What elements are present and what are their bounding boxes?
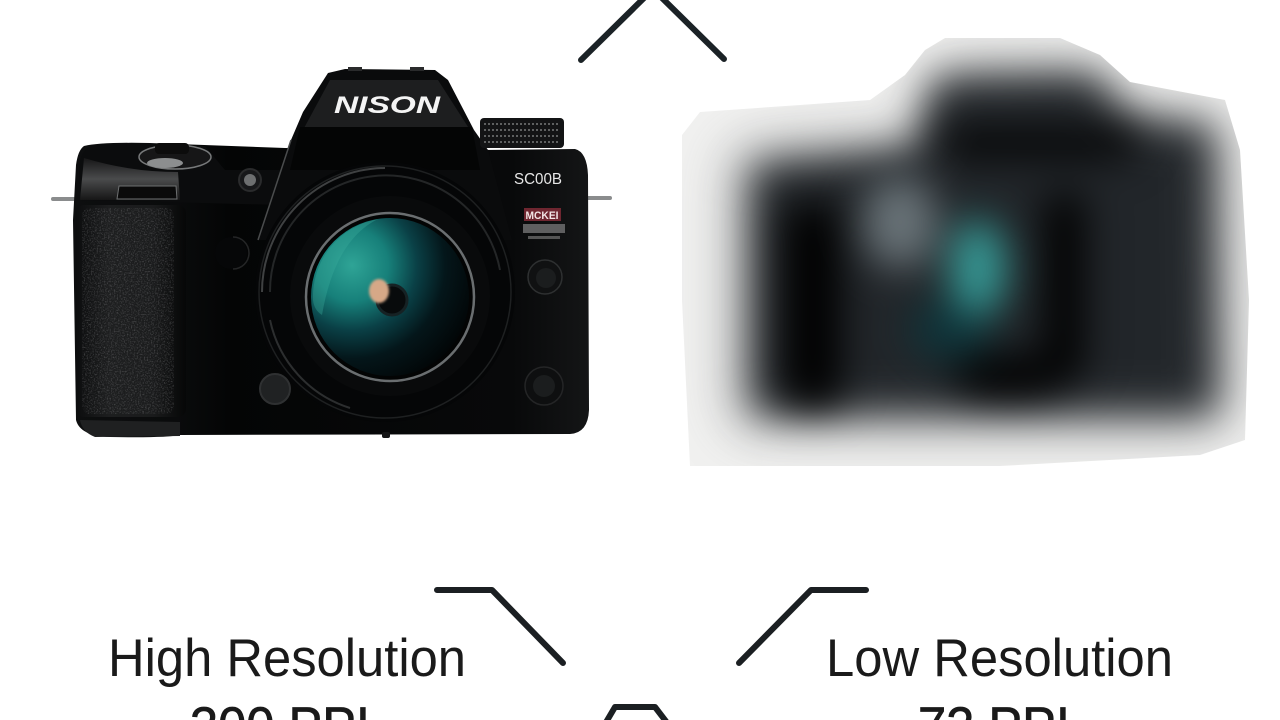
blurred dark and teal areas bbox=[785, 130, 1135, 405]
blurred body halo bbox=[735, 70, 1228, 425]
blurred body bbox=[752, 75, 1216, 414]
round buttons bbox=[215, 237, 563, 405]
icon: camera outline, cropped bbox=[605, 707, 668, 720]
hot shoe nubs bbox=[348, 67, 424, 71]
right leader arrow bbox=[739, 590, 866, 663]
sharp camera photo bbox=[51, 67, 612, 438]
bottom tripod nub bbox=[382, 432, 390, 438]
strap lugs bbox=[51, 196, 612, 201]
brand label: NISON bbox=[334, 92, 441, 119]
model label: SC00B bbox=[514, 171, 562, 188]
camera body bbox=[73, 143, 589, 437]
red and grey badge bbox=[523, 208, 565, 239]
small hot-key grille bbox=[117, 186, 177, 199]
lens glass bbox=[311, 218, 469, 376]
high resolution label: High Resolution bbox=[108, 629, 466, 688]
low resolution label: Low Resolution bbox=[826, 629, 1173, 688]
red and grey badge: MCKEI bbox=[526, 210, 558, 222]
top right dial bbox=[480, 118, 564, 148]
grip leather texture bbox=[76, 205, 186, 417]
lens reflection bbox=[369, 279, 389, 303]
bottom grip highlight bbox=[80, 420, 180, 437]
blurred camera photo bbox=[670, 30, 1260, 475]
left leader arrow bbox=[437, 590, 563, 663]
mode dial bbox=[139, 143, 211, 169]
lens assembly bbox=[255, 162, 515, 422]
top chevron arrow bbox=[581, 0, 724, 60]
viewfinder prism bbox=[258, 69, 512, 240]
silver button bbox=[239, 169, 261, 191]
top plate left bbox=[79, 145, 282, 205]
